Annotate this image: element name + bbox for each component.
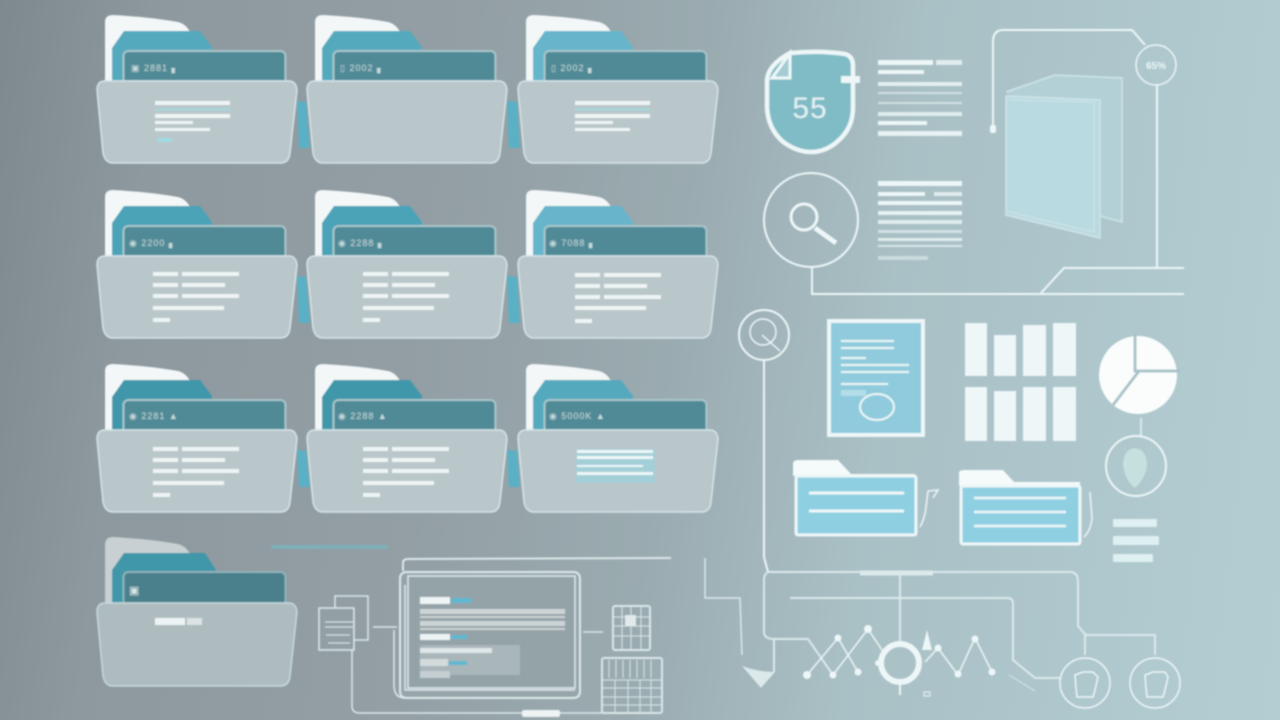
device badge right <box>1130 658 1180 708</box>
magnifier circle <box>764 173 858 267</box>
folder tab label: ▯ 2002 ▖ <box>340 63 385 74</box>
folder text lines <box>153 447 239 497</box>
folder text lines <box>575 101 650 131</box>
folder tab icon: ▣ <box>129 585 139 597</box>
folder tab label: ◉ 2288 ▲ <box>338 411 388 421</box>
folder row 3 column 2 <box>307 364 507 512</box>
folder row 3 column 1 <box>97 364 297 512</box>
folder row 1 column 2 <box>307 15 507 163</box>
document card <box>829 321 923 435</box>
blue folder right <box>959 470 1092 544</box>
line chart left <box>803 625 882 679</box>
folder highlighted text box <box>576 449 655 483</box>
vertical line from Q badge <box>764 360 768 572</box>
folder tab label: ◉ 2200 ▖ <box>129 238 177 249</box>
connector pill <box>522 710 560 717</box>
line chart right <box>922 630 996 696</box>
funnel marker <box>742 666 775 688</box>
text block upper <box>878 60 962 136</box>
monitor <box>400 572 580 698</box>
folder row 1 column 3 <box>518 15 718 163</box>
folder text lines <box>153 272 239 322</box>
folder row 2 column 2 <box>307 190 507 338</box>
callout end dot <box>990 125 996 133</box>
top callout line <box>993 30 1145 125</box>
Q badge <box>739 310 789 360</box>
teal accent line <box>271 545 388 549</box>
stacked bars <box>1113 519 1159 562</box>
location pin badge <box>1106 436 1166 496</box>
circuit lines <box>705 558 1155 691</box>
base lines <box>812 85 1184 294</box>
folder tab label: ▣ 2881 ▖ <box>131 63 179 74</box>
small data badge <box>1136 45 1176 85</box>
binder panel <box>1006 75 1122 238</box>
text block lower <box>878 181 962 260</box>
connector stem <box>1140 418 1142 436</box>
folder row 2 column 1 <box>97 190 297 338</box>
bar chart <box>965 323 1076 441</box>
monitor content <box>420 597 565 678</box>
folder text lines <box>363 447 449 497</box>
teal connectors between folders <box>297 100 520 487</box>
folder text bar <box>155 618 202 625</box>
folder row 4 column 1 <box>97 537 297 686</box>
folder tab label: ◉ 7088 ▖ <box>549 238 597 249</box>
folder clip <box>1084 492 1092 537</box>
pie chart <box>1099 334 1180 414</box>
folder row 3 column 3 <box>518 364 718 512</box>
folder tab label: ◉ 2288 ▖ <box>338 238 386 249</box>
folder tab label: ▯ 2002 ▖ <box>551 63 596 74</box>
blue folder left <box>793 460 938 535</box>
folder row 2 column 3 <box>518 190 718 338</box>
screen diagram <box>319 558 671 713</box>
folder text lines <box>155 101 230 142</box>
folder tab label: ◉ 5000K ▲ <box>549 411 606 421</box>
small table <box>613 606 650 650</box>
large table <box>602 658 662 713</box>
folder text lines <box>575 273 661 323</box>
folder row 1 column 1 <box>97 15 297 163</box>
connector lines <box>403 558 671 571</box>
gear ring <box>875 644 919 695</box>
small data badge: 65% <box>1146 61 1166 72</box>
folder clip <box>920 490 938 527</box>
shield badge <box>767 52 860 152</box>
device badge left <box>1060 658 1110 708</box>
shield label: 55 <box>792 92 828 125</box>
folder text lines <box>363 272 449 322</box>
document icons <box>319 596 368 650</box>
folder tab label: ◉ 2281 ▲ <box>129 411 179 421</box>
